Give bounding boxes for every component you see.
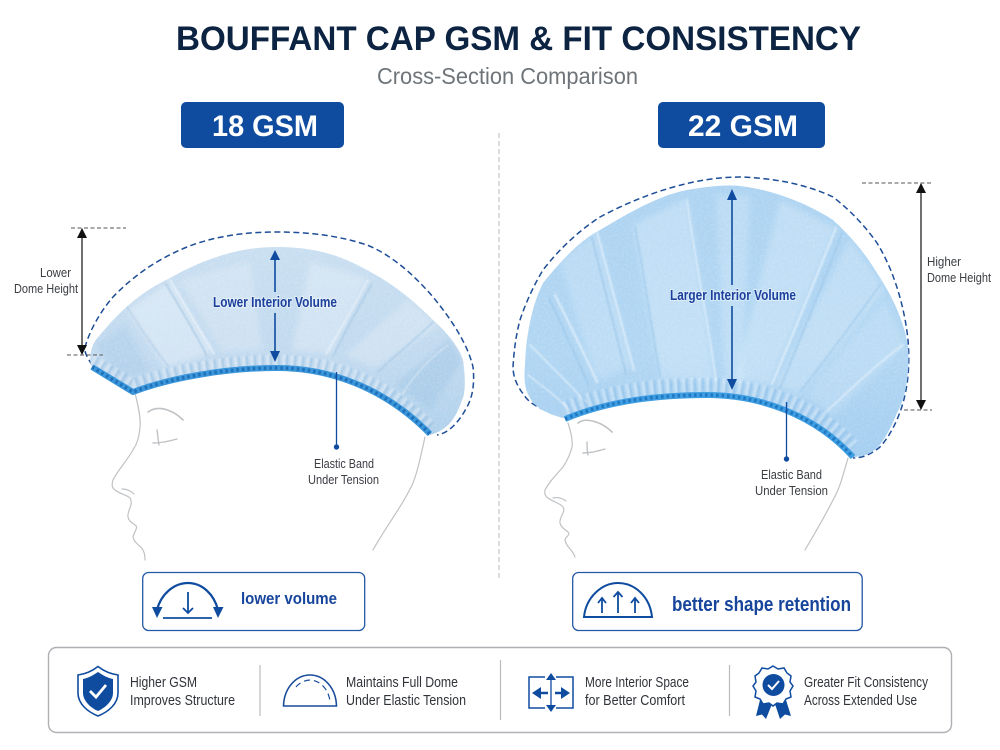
icon: award rosette — [753, 666, 793, 719]
head outline: 18 GSM — [112, 393, 425, 560]
icon: interior space arrows — [529, 673, 573, 712]
callout: elastic band 22 GSM: Elastic Band — [761, 468, 822, 482]
dimension: lower dome height — [14, 228, 126, 355]
badge: 22 GSM: 22 GSM — [688, 110, 798, 143]
dimension: higher dome height: Higher — [927, 255, 961, 269]
text: more interior space: for Better Comfort — [585, 693, 685, 709]
panel: 22 GSM cross-section — [513, 177, 991, 557]
dimension: higher dome height — [862, 183, 991, 410]
callout box: lower volume — [143, 572, 365, 630]
dimension: lower dome height: Dome Height — [14, 282, 78, 296]
ghost dome outline: 22 GSM — [513, 177, 909, 458]
label: larger interior volume: Larger Interior Volume — [670, 287, 796, 304]
badge: 18 GSM: 18 GSM — [212, 110, 318, 143]
text: maintains full dome: Under Elastic Tension — [346, 693, 466, 709]
panel: 18 GSM cross-section — [14, 228, 475, 560]
icon: better retention dome — [584, 583, 652, 617]
cap: 18 GSM — [90, 247, 465, 435]
elastic band: 18 GSM — [92, 367, 430, 434]
text: higher GSM: Higher GSM — [130, 675, 197, 691]
text: greater fit consistency: Greater Fit Consistency — [804, 675, 929, 691]
badge: 18 GSM — [181, 102, 344, 148]
panel: benefits strip — [48, 648, 952, 732]
cap: 22 GSM — [515, 180, 915, 465]
text: maintains full dome: Maintains Full Dome — [346, 675, 458, 691]
dimension: higher dome height: Dome Height — [927, 271, 991, 285]
callout: elastic band 22 GSM: Under Tension — [755, 484, 828, 498]
callout box: better shape retention — [573, 572, 862, 630]
badge: 22 GSM — [658, 102, 825, 148]
callout: elastic band 22 GSM — [755, 402, 828, 498]
text: higher GSM — [130, 675, 235, 709]
center divider — [498, 133, 500, 580]
ghost dome outline: 18 GSM — [85, 232, 474, 435]
dimension: lower dome height: Lower — [40, 266, 71, 280]
text: higher GSM: Improves Structure — [130, 693, 235, 709]
arrow: interior volume 18 GSM — [270, 250, 280, 362]
text: greater fit consistency: Across Extended Use — [804, 693, 917, 709]
text: maintains full dome — [346, 675, 466, 709]
callout: elastic band 18 GSM: Elastic Band — [314, 457, 374, 471]
icon: dome — [284, 675, 336, 706]
title: BOUFFANT CAP GSM & FIT CONSISTENCY — [176, 20, 861, 58]
text: more interior space — [585, 675, 689, 709]
text: better shape retention: better shape retention — [672, 594, 851, 616]
text: lower volume: lower volume — [241, 589, 337, 608]
elastic band: 22 GSM — [565, 395, 853, 457]
subtitle: Cross-Section Comparison — [377, 63, 638, 89]
head outline: 22 GSM — [545, 420, 848, 557]
icon: lower volume dome — [152, 583, 224, 618]
label: lower interior volume: Lower Interior Volume — [213, 294, 337, 311]
text: greater fit consistency — [804, 675, 929, 709]
callout: elastic band 18 GSM: Under Tension — [308, 473, 379, 487]
callout: elastic band 18 GSM — [308, 372, 379, 487]
icon: shield — [78, 666, 118, 716]
arrow: interior volume 22 GSM — [727, 189, 737, 390]
text: more interior space: More Interior Space — [585, 675, 689, 691]
